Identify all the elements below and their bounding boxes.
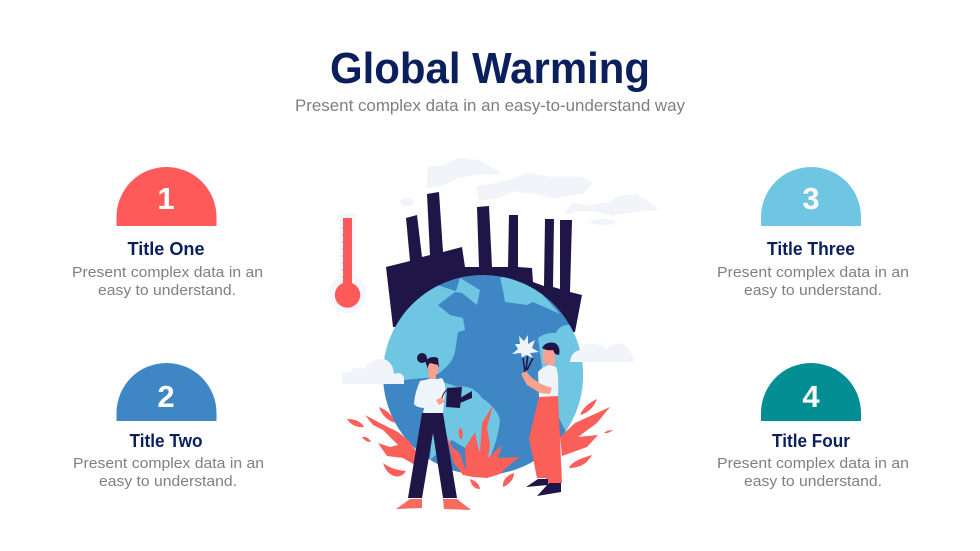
badge two	[116, 363, 216, 421]
badge two: 2	[157, 379, 175, 414]
text: description two: Present complex data in an	[73, 455, 264, 472]
illustration: flames	[347, 399, 613, 489]
panel: item two	[73, 363, 264, 490]
icon: thermometer	[328, 213, 366, 313]
illustration: clouds	[342, 343, 634, 384]
heading: title three: Title Three	[767, 239, 855, 259]
text: description four	[717, 455, 909, 490]
title: Global Warming	[330, 44, 650, 93]
text: description two	[73, 455, 264, 490]
badge one: 1	[157, 181, 175, 216]
text: description three: Present complex data in an	[717, 264, 909, 281]
subtitle: Present complex data in an easy-to-understand way	[295, 96, 685, 115]
illustration: smoke	[400, 159, 656, 225]
illustration: woman with watering can	[396, 353, 472, 510]
text: description four: easy to understand.	[744, 473, 882, 490]
text: description one	[72, 264, 263, 299]
illustration: man with flowers	[512, 335, 562, 496]
badge four: 4	[802, 379, 820, 414]
text: description three	[717, 264, 909, 299]
panel: item four	[717, 363, 909, 490]
infographic: global warming	[73, 52, 908, 510]
badge four	[761, 363, 861, 421]
text: description one: Present complex data in an	[72, 264, 263, 281]
badge three	[761, 167, 861, 226]
heading: title four: Title Four	[772, 431, 850, 451]
heading: title two: Title Two	[130, 431, 202, 451]
text: description two: easy to understand.	[99, 473, 237, 490]
text: description four: Present complex data in an	[717, 455, 909, 472]
illustration: factory silhouette	[386, 192, 582, 332]
illustration: globe	[380, 270, 590, 475]
text: description one: easy to understand.	[98, 282, 236, 299]
badge one	[116, 167, 216, 226]
panel: item three	[717, 167, 909, 299]
panel: item one	[72, 167, 263, 299]
text: description three: easy to understand.	[744, 282, 882, 299]
heading: title one: Title One	[128, 239, 204, 259]
badge three: 3	[802, 181, 820, 216]
